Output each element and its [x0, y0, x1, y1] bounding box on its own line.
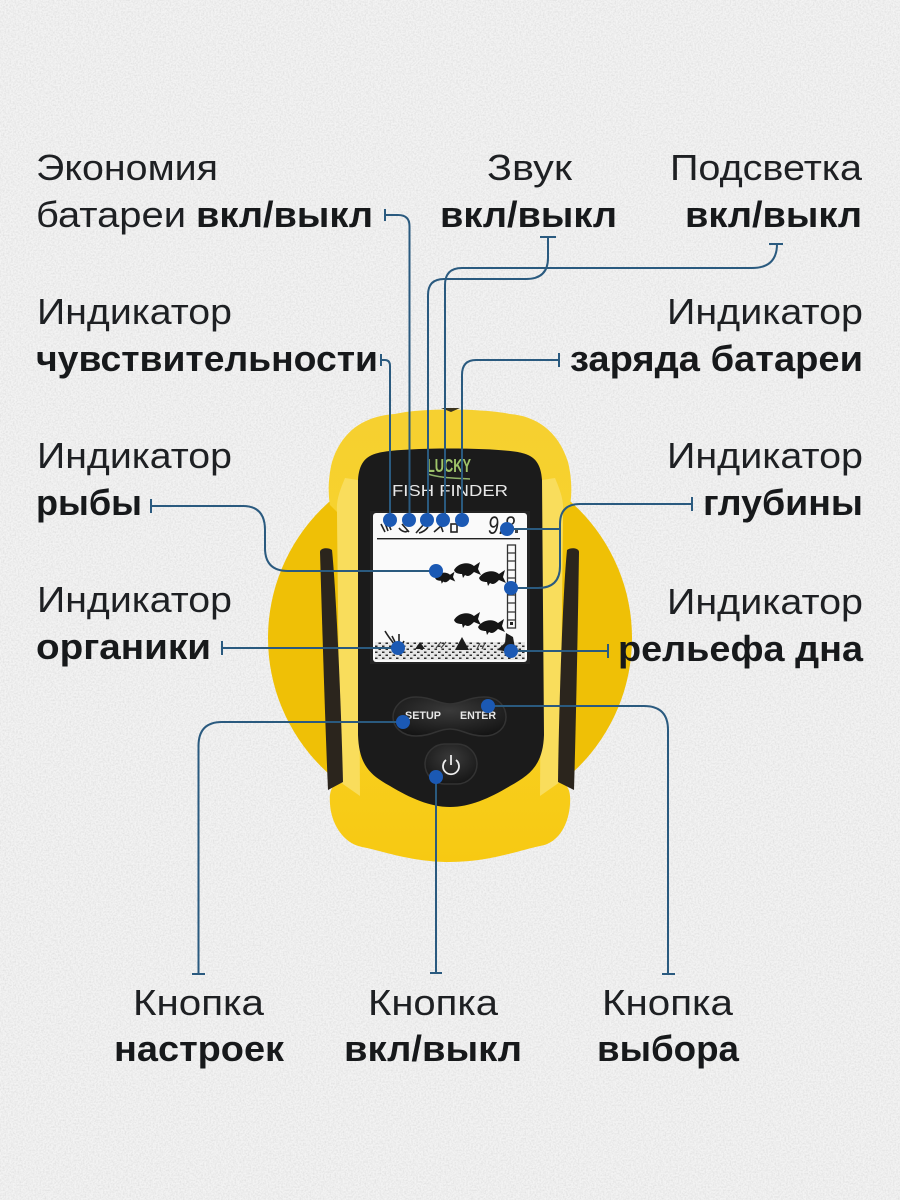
line: battery saver: [385, 209, 410, 520]
line: depth: [507, 497, 692, 588]
SETUP label: SETUP: [405, 710, 441, 722]
label: fish: Индикатор: [37, 435, 232, 476]
label: backlight: [670, 147, 863, 235]
yellow circle behind device: [268, 456, 632, 820]
organics: [385, 631, 404, 650]
label: fish: [36, 435, 232, 523]
logo: FISH FINDER: FISH FINDER: [392, 483, 508, 500]
label: sound: вкл/выкл: [440, 194, 617, 235]
label: settings button: [114, 982, 285, 1069]
label: battery charge: Индикатор: [667, 291, 863, 332]
line: enter: [488, 706, 675, 974]
line: organics: [222, 641, 398, 655]
line: setup: [192, 722, 403, 974]
label: sensitivity: [36, 291, 378, 379]
label: depth: [667, 435, 863, 523]
line: sound: [428, 237, 556, 520]
label: select button: [597, 982, 740, 1069]
label: seabed: рельефа дна: [618, 628, 864, 669]
label: battery saver: вкл/выкл: [196, 194, 373, 235]
line: power: [430, 777, 442, 973]
label: seabed: [618, 581, 864, 669]
housing highlight left: [337, 478, 360, 796]
status icons: [381, 523, 457, 533]
label: battery saver: батареи: [36, 194, 186, 235]
label: organics: [36, 579, 232, 667]
rocks: [415, 633, 515, 652]
label: select button: выбора: [597, 1028, 740, 1069]
left rubber grip: [320, 548, 343, 790]
label: select button: Кнопка: [602, 982, 734, 1023]
status divider: [377, 538, 520, 539]
depth reading: 9.8: [488, 512, 515, 540]
callout lines: [151, 209, 783, 974]
label: organics: Индикатор: [37, 579, 232, 620]
callout dots: [383, 513, 518, 784]
label: settings button: Кнопка: [133, 982, 265, 1023]
label: organics: органики: [36, 626, 211, 667]
label: sensitivity: чувствительности: [36, 338, 378, 379]
label: fish: рыбы: [36, 482, 142, 523]
label: settings button: настроек: [114, 1028, 285, 1069]
logo: LUCKY: LUCKY: [427, 456, 471, 476]
yellow housing: [329, 410, 571, 862]
logo wave: [428, 474, 470, 479]
label: battery saver: [36, 147, 373, 235]
black face: [358, 448, 544, 807]
line: backlight: [445, 244, 783, 520]
line: battery charge: [462, 353, 559, 520]
seabed: [375, 631, 525, 660]
label: backlight: вкл/выкл: [685, 194, 862, 235]
power button: [425, 744, 477, 784]
label: power button: [344, 982, 522, 1069]
label: battery charge: заряда батареи: [570, 338, 863, 379]
SETUP / ENTER button: [393, 697, 506, 736]
device: fish finder: [320, 408, 579, 862]
line: seabed: [511, 644, 608, 658]
LCD screen: [373, 512, 527, 662]
screen bezel: [370, 511, 530, 664]
label: battery saver: Экономия: [36, 147, 218, 188]
label: seabed: Индикатор: [667, 581, 863, 622]
label: sound: [440, 147, 617, 235]
label: sound: Звук: [487, 147, 572, 188]
fish icons: [435, 562, 506, 635]
right rubber grip: [558, 548, 579, 790]
housing highlight right: [540, 478, 563, 796]
label: battery charge: [570, 291, 863, 379]
ENTER label: ENTER: [460, 710, 496, 722]
label: depth: глубины: [703, 482, 863, 523]
label: backlight: Подсветка: [670, 147, 863, 188]
line: sensitivity: [381, 354, 390, 520]
depth unit: [515, 529, 518, 533]
label: power button: вкл/выкл: [344, 1028, 522, 1069]
label: depth: Индикатор: [667, 435, 863, 476]
label: power button: Кнопка: [368, 982, 499, 1023]
depth scale: [508, 545, 516, 628]
line: fish: [151, 499, 436, 571]
top notch: [441, 408, 460, 412]
label: sensitivity: Индикатор: [37, 291, 232, 332]
